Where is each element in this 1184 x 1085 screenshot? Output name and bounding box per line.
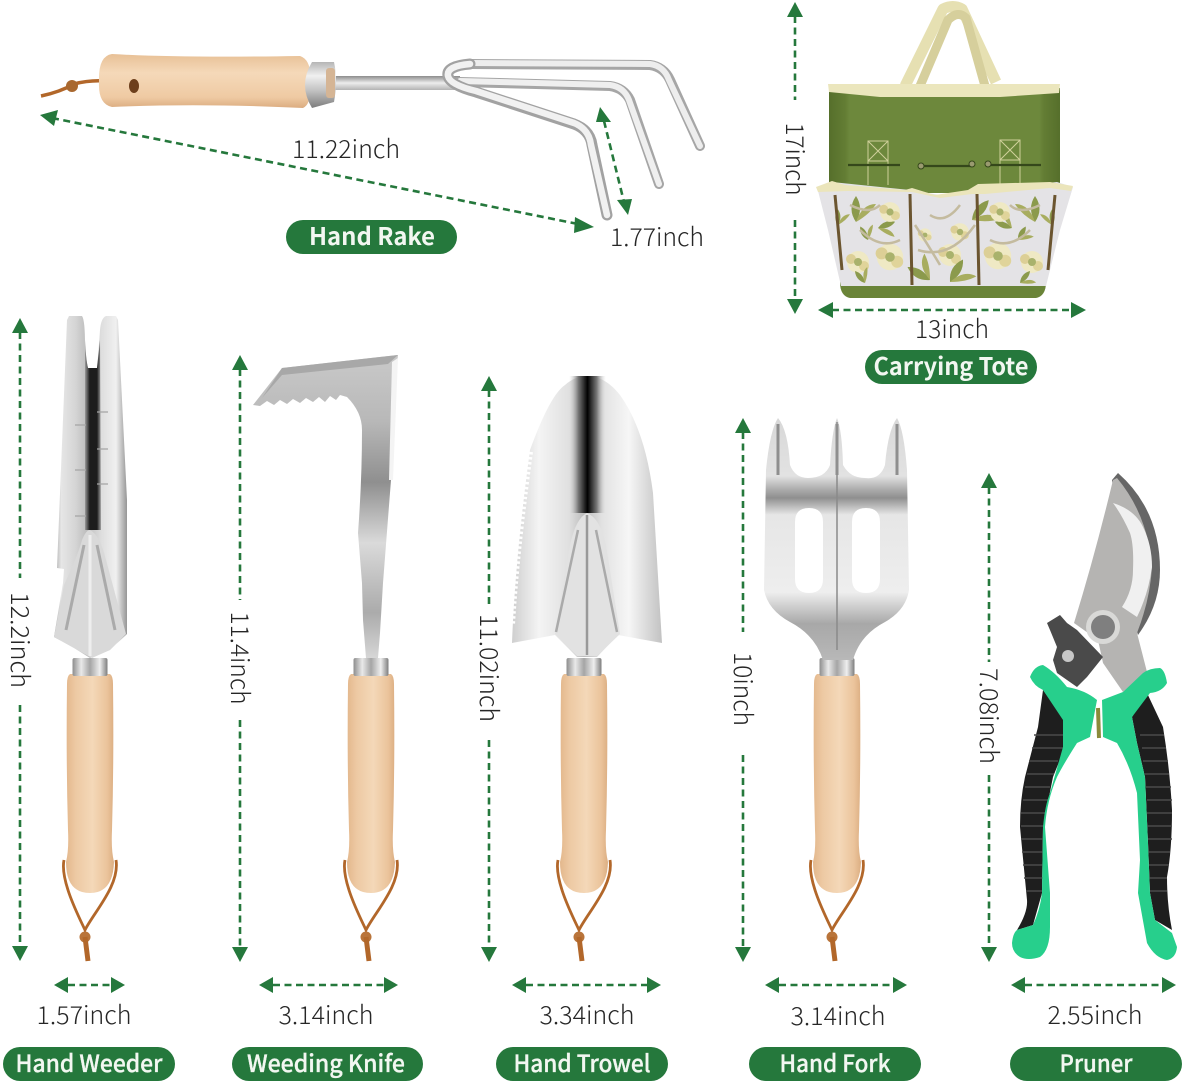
panel: carrying tote bbox=[816, 6, 1073, 298]
pill: Pruner bbox=[1010, 1044, 1182, 1081]
pruner grip ridges bbox=[1021, 735, 1172, 891]
panel: hand trowel bbox=[512, 376, 662, 961]
weeder spade bbox=[54, 530, 126, 658]
icon: rake tines bbox=[335, 63, 700, 215]
arrow: 11.4inch bbox=[232, 355, 248, 962]
panel: pruner bbox=[1012, 473, 1177, 960]
knife blade bbox=[253, 355, 398, 658]
pill: Pruner: Pruner bbox=[1060, 1044, 1133, 1079]
arrow: 3.14inch knife bbox=[259, 977, 398, 993]
label: 12.2inch: 12.2inch bbox=[3, 592, 39, 688]
trowel serrated edge bbox=[513, 452, 531, 625]
pruner spring bbox=[1098, 708, 1099, 738]
arrow: 17inch tote height bbox=[787, 2, 803, 314]
trowel grip bbox=[557, 658, 610, 961]
pill: Carrying Tote: Carrying Tote bbox=[874, 347, 1028, 382]
pruner hook bbox=[1112, 473, 1160, 635]
fork head bbox=[764, 418, 909, 660]
fork spine bbox=[836, 422, 838, 650]
arrow: 2.55inch bbox=[1011, 977, 1176, 993]
panel: hand rake bbox=[41, 54, 700, 215]
pruner pivot bolt bbox=[1091, 615, 1115, 639]
rake ferrule socket bbox=[326, 68, 335, 98]
trowel blade bbox=[512, 376, 662, 657]
fork grip bbox=[810, 658, 863, 961]
label: 1.57inch: 1.57inch bbox=[36, 996, 132, 1032]
label: 7.08inch: 7.08inch bbox=[972, 668, 1008, 764]
pruner right green handle bbox=[1102, 668, 1177, 960]
rake handle bbox=[99, 54, 310, 108]
pruner lock bbox=[1047, 615, 1103, 687]
pruner left black grip bbox=[1017, 690, 1065, 930]
label: 11.02inch: 11.02inch bbox=[472, 614, 508, 722]
tote pocket seams bbox=[835, 194, 1055, 285]
floral pattern bbox=[835, 196, 1055, 292]
arrow: 1.57inch bbox=[54, 977, 125, 993]
label: 17inch: 17inch bbox=[778, 122, 814, 196]
weeder notch cut bbox=[84, 314, 102, 367]
pruner left green handle bbox=[1012, 665, 1097, 959]
label: 11.4inch: 11.4inch bbox=[223, 612, 259, 704]
arrow: 3.14inch fork bbox=[765, 977, 907, 993]
trowel ridges bbox=[556, 515, 617, 655]
knife grip bbox=[344, 658, 397, 961]
pill: Weeding Knife: Weeding Knife bbox=[247, 1044, 405, 1079]
pill: Hand Fork: Hand Fork bbox=[780, 1044, 891, 1079]
panel: weeding knife bbox=[253, 355, 398, 961]
arrow: 7.08inch bbox=[981, 473, 997, 962]
panel: hand fork bbox=[764, 418, 909, 961]
tote base bbox=[840, 282, 1046, 298]
weeder spade ridges bbox=[66, 535, 115, 656]
tote slots bbox=[848, 161, 1041, 169]
weeder grip bbox=[63, 658, 116, 961]
label: 13inch: 13inch bbox=[915, 310, 989, 346]
knife edge highlight bbox=[389, 358, 398, 480]
trowel spine bbox=[555, 513, 620, 656]
label: 3.34inch: 3.34inch bbox=[540, 996, 634, 1032]
weeder channel bbox=[85, 340, 101, 530]
arrow: 10inch bbox=[735, 418, 751, 962]
pill: Hand Fork bbox=[749, 1044, 921, 1081]
arrow: 11.22 rake length bbox=[40, 110, 594, 233]
weeder blade bbox=[54, 316, 127, 658]
tote stitching bbox=[868, 140, 1020, 185]
arrow: 11.02inch bbox=[481, 376, 497, 962]
weeder scale marks bbox=[75, 412, 108, 516]
pruner pivot bbox=[1086, 610, 1120, 644]
tote pocket trim bbox=[816, 181, 1073, 198]
rake ferrule bbox=[305, 62, 336, 108]
arrow: 1.77 rake width bbox=[596, 107, 632, 215]
pruner lock screw bbox=[1062, 650, 1074, 662]
pruner bevel bbox=[1113, 503, 1152, 617]
icon: rake leather cord bbox=[41, 80, 135, 96]
tote body bbox=[829, 88, 1060, 193]
label: 3.14inch knife: 3.14inch bbox=[278, 996, 374, 1032]
pill: Hand Weeder: Hand Weeder bbox=[16, 1044, 163, 1079]
panel: hand weeder bbox=[54, 314, 127, 961]
fork tine shading bbox=[778, 424, 897, 475]
arrow: 13inch tote width bbox=[818, 302, 1086, 318]
trowel dark stripe bbox=[569, 376, 606, 513]
pruner right black grip bbox=[1132, 693, 1172, 930]
arrow: 3.34inch bbox=[512, 977, 661, 993]
tote floral pockets bbox=[817, 182, 1073, 286]
pill: Hand Rake: Hand Rake bbox=[309, 217, 435, 252]
knife highlight bbox=[262, 355, 398, 398]
tote trim bbox=[828, 84, 1060, 97]
tote handles bbox=[905, 6, 996, 86]
label: 1.77inch: 1.77inch bbox=[610, 218, 704, 254]
pruner blade bbox=[1074, 478, 1152, 692]
label: 11.22inch: 11.22inch bbox=[292, 130, 400, 166]
pill: Hand Trowel: Hand Trowel bbox=[514, 1044, 650, 1079]
label: 10inch: 10inch bbox=[726, 652, 762, 726]
arrow: 12.2inch bbox=[12, 318, 28, 961]
label: 3.14inch fork: 3.14inch bbox=[790, 997, 886, 1033]
rake hole bbox=[129, 79, 139, 93]
label: 2.55inch: 2.55inch bbox=[1048, 996, 1142, 1032]
